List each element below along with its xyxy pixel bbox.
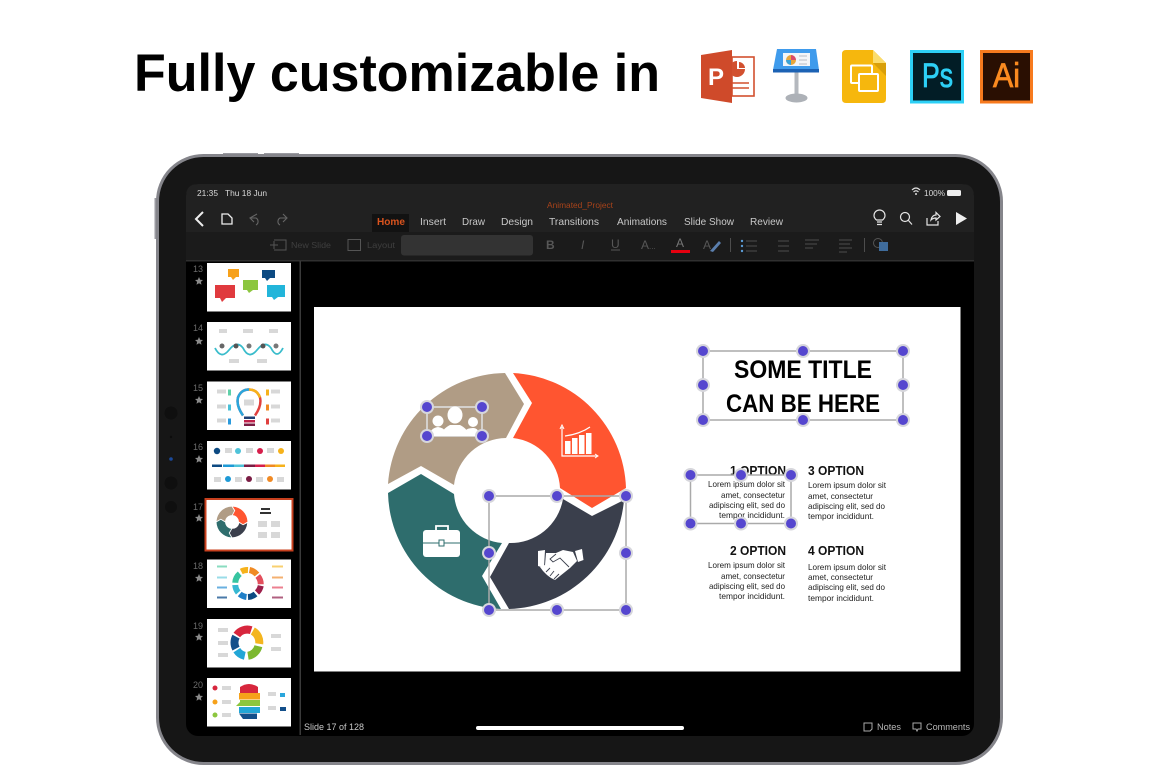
menu tabs: Design: [501, 216, 533, 228]
option 2 text: 2 OPTION: [730, 544, 786, 558]
hardware buttons: [154, 153, 299, 239]
menu tabs: Slide Show: [684, 216, 734, 228]
option 2 text: tempor incididunt.: [719, 591, 785, 601]
option 3 text: tempor incididunt.: [808, 511, 874, 521]
icon: PowerPoint: [701, 50, 754, 103]
option 2 text: amet, consectetur: [721, 571, 785, 581]
slide title: CAN BE HERE: [726, 390, 880, 418]
option 3 text: 3 OPTION: [808, 464, 864, 478]
thumbnail 15: light bulb: [207, 382, 291, 430]
thumbnail numbers and stars: 13: [193, 264, 203, 274]
thumbnail 14: wave: [207, 322, 291, 370]
main slide: [314, 307, 960, 672]
option 4 text: 4 OPTION: [808, 544, 864, 558]
thumbnail 19: swirl: [207, 619, 291, 668]
option 4 text: Lorem ipsum dolor sit: [808, 562, 887, 572]
menu tabs: Home: [377, 216, 405, 228]
icon: Illustrator: Ai: [993, 57, 1020, 95]
donut selection handles: [420, 400, 633, 617]
thumbnail 16: timeline: [207, 441, 291, 490]
option 3 text: Lorem ipsum dolor sit: [808, 480, 887, 490]
formatting toolbar: I: [581, 238, 585, 252]
thumbnail numbers and stars: 20: [193, 680, 203, 690]
slide thumbnails panel: [193, 263, 292, 726]
screen: [186, 184, 974, 736]
title: Fully customizable in: [134, 44, 660, 103]
option 1 text: adipiscing elit, sed do: [709, 500, 785, 510]
option 3 text: amet, consectetur: [808, 491, 873, 501]
option 3 text: adipiscing elit, sed do: [808, 501, 885, 511]
menu tabs: [372, 214, 783, 232]
option 1 text: Lorem ipsum dolor sit: [708, 479, 786, 489]
segment: tan with people icon: [388, 373, 524, 485]
tablet bezel: [158, 156, 1002, 764]
slide title: [696, 344, 910, 427]
thumbnail numbers and stars: 17: [193, 502, 203, 512]
thumbnail 18: ring of segments: [207, 560, 291, 608]
option 4 text: adipiscing elit, sed do: [808, 582, 885, 592]
slide title: SOME TITLE: [734, 356, 872, 384]
option 1 text: tempor incididunt.: [719, 510, 785, 520]
thumbnail numbers and stars: 14: [193, 323, 203, 333]
formatting toolbar: ...: [649, 242, 656, 251]
option 2 text: Lorem ipsum dolor sit: [708, 560, 786, 570]
formatting toolbar: [186, 232, 974, 262]
status bar: 100%: [924, 188, 945, 198]
icon: PowerPoint: P: [708, 64, 724, 91]
thumbnail numbers and stars: [193, 264, 203, 701]
status bar: [197, 188, 961, 198]
sidebar divider: [300, 261, 301, 735]
tablet device: [154, 153, 1002, 764]
status bar: 21:35: [197, 188, 218, 198]
status footer: Comments: [926, 722, 971, 732]
thumbnail numbers and stars: 15: [193, 383, 203, 393]
option 1 text: [684, 464, 798, 530]
formatting toolbar: B: [546, 238, 555, 252]
thumbnail numbers and stars: 19: [193, 621, 203, 631]
formatting toolbar: U: [611, 237, 620, 251]
segment: dark with handshake icon: [490, 499, 624, 609]
thumbnail numbers and stars: 18: [193, 561, 203, 571]
formatting toolbar: A: [676, 236, 684, 250]
thumbnail numbers and stars: 16: [193, 442, 203, 452]
top toolbar: [186, 184, 974, 232]
action icons right: [874, 210, 967, 225]
thumbnail 17: selected donut slide: [206, 499, 292, 550]
icon: Google Slides: [842, 50, 886, 103]
option 2 text: [708, 544, 786, 601]
option 4 text: [808, 544, 887, 603]
icon: Photoshop: Ps: [922, 57, 953, 95]
icon: Illustrator: [982, 52, 1032, 102]
formatting toolbar: A: [703, 238, 711, 252]
thumbnail 13: speech bubbles: [207, 263, 291, 312]
icon: Photoshop: [912, 52, 962, 102]
status footer: Notes: [877, 722, 902, 732]
formatting toolbar: New Slide: [291, 240, 331, 250]
donut chart: [388, 373, 626, 609]
menu tabs: Draw: [462, 216, 485, 228]
option 2 text: adipiscing elit, sed do: [709, 581, 785, 591]
segment: orange with chart icon: [513, 373, 626, 508]
option 1 text: 1 OPTION: [730, 464, 786, 478]
nav icons left: [196, 212, 287, 226]
menu tabs: Transitions: [549, 216, 599, 228]
segment: teal with briefcase icon: [388, 474, 502, 609]
menu tabs: Animations: [617, 216, 667, 228]
camera sensors: [164, 406, 178, 513]
status footer: Slide 17 of 128: [304, 722, 364, 732]
option 4 text: tempor incididunt.: [808, 593, 874, 603]
icon: Keynote: [773, 49, 819, 102]
status bar: Thu 18 Jun: [225, 188, 267, 198]
formatting toolbar: A: [641, 238, 649, 252]
menu tabs: Insert: [420, 216, 446, 228]
thumbnail 20: head layers: [207, 678, 291, 726]
status footer: [304, 722, 971, 732]
formatting toolbar: Layout: [367, 240, 396, 250]
file name: Animated_Project: [547, 200, 614, 210]
option 3 text: [808, 464, 887, 521]
menu tabs: Review: [750, 216, 783, 228]
option 1 text: amet, consectetur: [721, 490, 785, 500]
option 4 text: amet, consectetur: [808, 572, 873, 582]
